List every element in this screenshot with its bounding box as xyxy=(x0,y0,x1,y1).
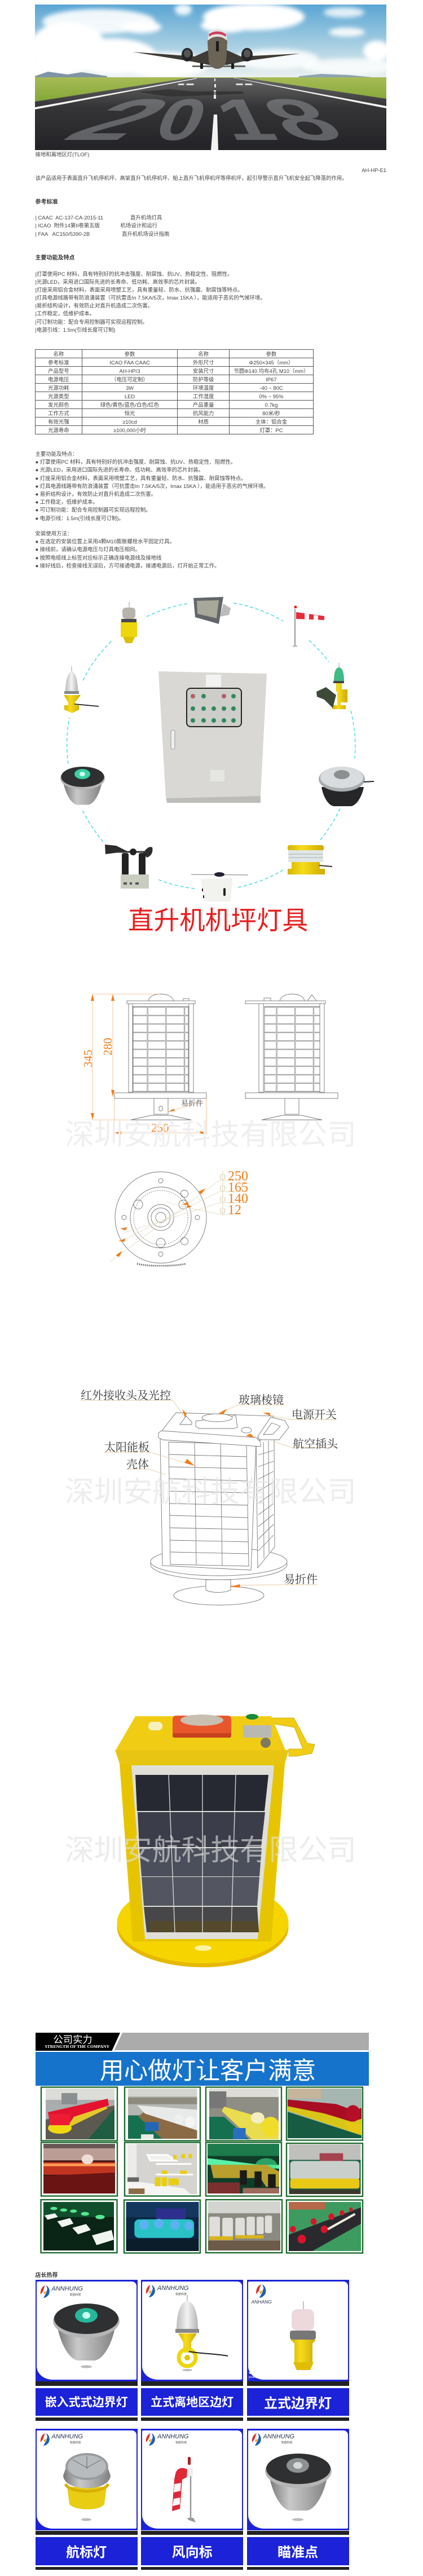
foot and base xyxy=(174,1586,264,1605)
logo: 安航科技 xyxy=(70,2441,81,2445)
dimension lines xyxy=(92,994,206,1134)
specification table: 有效光强 xyxy=(48,419,69,424)
silver embedded light xyxy=(319,767,374,806)
specification table: 产品重量 xyxy=(193,402,214,407)
callout: aviation plug: 航空插头 xyxy=(293,1435,338,1451)
product xyxy=(175,2295,228,2371)
specification table: 0.7kg xyxy=(265,402,277,407)
logo xyxy=(146,2285,189,2297)
logo: ANNHUNG xyxy=(263,2433,294,2440)
label: 立式离地区边灯 xyxy=(151,2393,233,2410)
green embedded light xyxy=(60,767,105,805)
standards list: 机场设计和运行 xyxy=(121,222,157,228)
right face xyxy=(256,1438,275,1568)
plane xyxy=(133,29,300,69)
specification table: 发光颜色 xyxy=(48,402,69,407)
specification table: 3W xyxy=(126,385,134,390)
heading: shop recommendations: 店长热荐 xyxy=(35,2272,58,2279)
description: 该产品适用于表面直升飞机停机坪、高架直升飞机停机坪、船上直升飞机停机坪等停机坪，起引导警示直升飞机安全起飞降落的作用。 xyxy=(35,175,347,181)
standards list: 直升机机场设计指南 xyxy=(122,231,169,237)
installation instructions: 安装使用方法： xyxy=(35,530,72,537)
section tag: company strength: 公司实力 xyxy=(53,2031,92,2046)
specification table: 绿色/黄色/蓝色/白色/红色 xyxy=(100,402,159,407)
yellow beacon xyxy=(288,845,332,874)
base plan view: ϕ xyxy=(219,1202,226,1216)
diameter labels xyxy=(228,1169,248,1217)
specification table: 工作方式 xyxy=(48,410,69,416)
dimension values: 345 xyxy=(81,1049,95,1067)
specification table: 光源类型 xyxy=(48,393,69,399)
base plan view: ϕ xyxy=(219,1191,226,1205)
product card: aiming point light xyxy=(247,2429,349,2570)
front shell xyxy=(160,1439,256,1570)
specification table: 抗风能力 xyxy=(193,410,214,416)
specification table: （电压可定制） xyxy=(111,376,148,383)
standards list xyxy=(35,214,169,237)
photo: red glow xyxy=(43,2144,115,2193)
features list 2: 主要功能及特点： xyxy=(35,451,78,457)
specification table: 工作湿度 xyxy=(193,393,214,399)
specification table: 节圆Φ140 均布4孔 M10（mm） xyxy=(233,368,309,373)
left elevation xyxy=(114,994,206,1120)
diameter labels: 165 xyxy=(228,1180,248,1195)
feature list: |工作稳定，低维护成本。 xyxy=(35,310,95,316)
specification table: 光源寿命 xyxy=(48,427,69,433)
photo: red lamps line xyxy=(46,2089,114,2139)
feature list: |电源引线：1.5m(引线长度可订制) xyxy=(35,327,116,333)
specification table: 安装尺寸 xyxy=(193,368,214,373)
standards list: | FAA AC150/5390-2B xyxy=(35,231,90,237)
watermark: 深圳安航科技有限公司 xyxy=(65,1826,356,1869)
windsock xyxy=(293,606,324,647)
base plan view xyxy=(109,1168,248,1267)
hero photo: airplane over runway xyxy=(35,5,386,150)
diameter labels: 12 xyxy=(228,1203,241,1217)
photo: green panels xyxy=(43,2202,114,2250)
specification table: 0% ~ 95% xyxy=(259,393,283,399)
specification table: 灯罩：PC xyxy=(259,427,283,433)
logo xyxy=(252,2433,296,2446)
anemometer xyxy=(105,845,153,889)
factory photo grid xyxy=(40,2086,363,2254)
control cabinet xyxy=(158,671,267,803)
specification table: 主体：铝合金 xyxy=(255,419,287,424)
feature list: |灯罩使用PC 材料，具有特别好的抗冲击强度、耐腐蚀、抗UV、热稳定性、阻燃性。 xyxy=(35,271,232,277)
specification table: Φ250×345（mm） xyxy=(249,359,293,366)
specification table: 参考标准 xyxy=(48,359,69,366)
features list 2: ● 灯罩使用PC 材料，具有特别好的抗冲击强度、耐腐蚀、抗UV、热稳定性、阻燃性。 xyxy=(35,459,236,465)
watermark: 深圳安航科技有限公司 xyxy=(65,1111,356,1153)
product card: elevated lift-off edge light xyxy=(141,2280,243,2421)
features list 2: ● 灯座采用铝合金材料，表面采用喷塑工艺，具有重量轻、防水、抗强震、耐腐蚀等特点。 xyxy=(35,475,246,481)
product xyxy=(63,2453,111,2521)
photo: clear lamps line xyxy=(128,2089,197,2139)
specification table: ≥10cd xyxy=(122,419,137,424)
specification table xyxy=(35,349,314,434)
callout: solar panel: 太阳能板 xyxy=(104,1438,149,1454)
installation instructions: ● 按照电缆线上标签对应标示正确连接电源线及接地线 xyxy=(35,555,161,561)
specification table: 电源电压 xyxy=(48,376,69,383)
feature list xyxy=(35,271,266,333)
label: 立式边界灯 xyxy=(264,2392,332,2411)
product card: elevated edge light xyxy=(247,2280,349,2421)
label xyxy=(35,2537,138,2565)
specification table: ICAO FAA CAAC xyxy=(109,359,150,366)
logo xyxy=(41,2433,83,2446)
logo: 安航科技 xyxy=(281,2441,293,2445)
standards list: | ICAO 附件14第II卷第五版 xyxy=(35,222,100,228)
photo: green lamps xyxy=(208,2144,279,2193)
callout: shell: 壳体 xyxy=(126,1455,149,1471)
tall clear light xyxy=(121,602,137,643)
logo: ANNHUNG xyxy=(157,2285,189,2292)
specification table: 参数 xyxy=(125,351,135,357)
exploded isometric view xyxy=(81,1400,339,1606)
label xyxy=(35,2388,138,2416)
frames xyxy=(41,2087,363,2253)
logo: ANNHUNG xyxy=(157,2433,189,2440)
specification table: 防护等级 xyxy=(193,376,214,383)
logo xyxy=(251,2284,272,2304)
specification table: 名称 xyxy=(53,351,64,357)
product ring diagram xyxy=(60,597,374,902)
green obstruction light xyxy=(316,663,347,709)
top face xyxy=(160,1413,274,1441)
dimension elevations xyxy=(81,994,338,1135)
label: 瞄准点 xyxy=(277,2541,318,2561)
clear obstruction light xyxy=(64,666,99,713)
logo: ANHANG xyxy=(252,2298,272,2304)
installation instructions: ● 接线前，请确认电源电压与灯具电压相同。 xyxy=(35,546,140,552)
model code: AH-HP-E1 xyxy=(362,167,386,173)
photo: red lamps yellow base xyxy=(288,2089,362,2138)
specification table: 80米/秒 xyxy=(262,410,280,416)
label xyxy=(141,2388,243,2416)
section tag: company strength: STRENGTH OF THE COMPANY xyxy=(45,2044,109,2049)
specification table: 环境温度 xyxy=(193,385,214,390)
callout: power switch: 电源开关 xyxy=(292,1405,337,1422)
base plan view: ϕ xyxy=(219,1168,226,1183)
diameter labels: 140 xyxy=(228,1192,248,1206)
leader lines xyxy=(81,1400,339,1585)
label xyxy=(141,2537,243,2565)
label xyxy=(247,2388,349,2416)
photo: white cylinders xyxy=(208,2201,280,2250)
specification table: -40 ~ 80C xyxy=(259,385,283,390)
specification table: AH-HP/3 xyxy=(119,368,140,373)
label: 航标灯 xyxy=(66,2541,107,2561)
watermark: 深圳安航科技有限公司 xyxy=(65,1468,356,1510)
standards list: 直升机场灯具 xyxy=(130,214,162,221)
dashed ring xyxy=(67,603,355,889)
features list 2: ● 电源引线：1.5m(引线长度可订制)。 xyxy=(35,515,124,521)
product card: recessed edge light xyxy=(36,2280,138,2421)
product card: windsock xyxy=(141,2429,243,2570)
label xyxy=(247,2537,349,2565)
features list 2: ● 光源LED，采用进口国际先进的长寿命、低功耗、高效率的芯片封装。 xyxy=(35,467,204,473)
logo: ANNHUNG xyxy=(52,2433,83,2440)
product xyxy=(265,2453,332,2522)
photo: white yellow lamps xyxy=(209,2089,279,2139)
diameter labels: 250 xyxy=(228,1169,248,1184)
white box xyxy=(191,872,248,902)
handle xyxy=(258,1417,289,1440)
features list 2: ● 灯具电源线路带有防浪涌装置（可抗雷击In 7.5KA/5次，Imax 15KA ），能适用于恶劣的气候环境。 xyxy=(35,483,269,489)
dimension values xyxy=(81,1038,169,1135)
warranty note: 5-3 xyxy=(248,2365,259,2376)
arrows xyxy=(182,1409,271,1588)
dimension values: 250 xyxy=(151,1121,169,1135)
features list 2: ● 可订制功能：配合专用控制器可实现远程控制。 xyxy=(35,507,151,513)
logo: 安航科技 xyxy=(175,2441,187,2445)
solar cells xyxy=(135,1775,268,1932)
features list 2: ● 易折结构设计，有效防止对直升机造成二次伤害。 xyxy=(35,491,156,497)
dimension values: 280 xyxy=(101,1038,114,1056)
product photo: solar helipad light xyxy=(115,1714,315,1967)
photo: blue lamps xyxy=(126,2202,199,2251)
features list 2: ● 工作稳定，低维护成本。 xyxy=(35,499,98,505)
floodlight xyxy=(193,597,231,624)
section title: 直升机机坪灯具 xyxy=(128,900,308,937)
specification table: LED xyxy=(125,393,135,399)
logo xyxy=(146,2433,189,2446)
product xyxy=(53,2304,120,2368)
specification table: 恒光 xyxy=(125,410,135,416)
runway lettering xyxy=(42,87,360,153)
banner: 用心做灯让客户满意 xyxy=(100,2052,316,2086)
callout: IR receiver: 红外接收头及光控 xyxy=(81,1386,171,1403)
specification table: 参数 xyxy=(266,351,276,357)
heading: reference standards: 参考标准 xyxy=(35,199,58,205)
warranty note: years warranty xyxy=(248,2375,271,2379)
photo: solar red lamps xyxy=(289,2202,361,2251)
logo: 安航科技 xyxy=(70,2293,81,2296)
specification table: 产品型号 xyxy=(48,368,69,373)
product card: beacon xyxy=(36,2429,138,2570)
features list 2 xyxy=(35,451,269,521)
banner xyxy=(35,2052,369,2086)
feature list: |灯座采用铝合金材料，表面采用喷塑工艺，具有重量轻、防水、抗强震、耐腐蚀等特点。 xyxy=(35,287,243,293)
heading: main features: 主要功能及特点 xyxy=(35,255,74,261)
right elevation xyxy=(245,994,338,1120)
feature list: |易折结构设计，有效防止对直升机造成二次伤害。 xyxy=(35,302,153,309)
photo: showroom shelves xyxy=(127,2144,197,2194)
caption: 接地和离地区灯(TLOF) xyxy=(35,151,89,157)
installation instructions: ● 接好线后，检查接线无误后，方可接通电源，接通电源后，灯开始正常工作。 xyxy=(35,562,220,569)
logo: ANNHUNG xyxy=(52,2285,83,2292)
fragile part label: 易折件 xyxy=(181,1097,203,1108)
feature list: |可订制功能：配合专用控制器可实现远程控制。 xyxy=(35,319,148,325)
standards list: | CAAC AC-137-CA-2015-11 xyxy=(35,214,103,221)
callout: breakable part: 易折件 xyxy=(284,1570,318,1586)
specification table: 光源功耗 xyxy=(48,385,69,390)
installation instructions: ● 在选定的安装位置上采用4颗M10膨胀螺栓水平固定灯具。 xyxy=(35,538,175,544)
logo: 安航科技 xyxy=(175,2293,187,2296)
warranty note xyxy=(248,2365,271,2379)
photo: clear lamps array xyxy=(289,2144,361,2194)
specification table: 材质 xyxy=(198,419,209,424)
feature list: |光源LED，采用进口国际先进的长寿命、低功耗、高效率的芯片封装。 xyxy=(35,279,200,285)
installation instructions xyxy=(35,530,220,569)
specification table: 名称 xyxy=(198,351,209,357)
product xyxy=(290,2301,316,2370)
base plan view: ϕ xyxy=(219,1180,226,1194)
specification table: IP67 xyxy=(266,376,277,383)
logo xyxy=(41,2285,83,2298)
product xyxy=(172,2457,196,2522)
label: 嵌入式式边界灯 xyxy=(45,2393,128,2410)
specification table: 外形尺寸 xyxy=(193,359,214,366)
specification table: ≥100,000小时 xyxy=(113,427,146,433)
callout: glass prism: 玻璃棱镜 xyxy=(239,1391,284,1407)
section tag: company strength xyxy=(35,2032,369,2050)
label: 风向标 xyxy=(172,2541,213,2561)
feature list: |灯具电源线路带有防浪涌装置（可抗雷击In 7.5KA/5次，Imax 15KA ），能适用于恶劣的气候环境。 xyxy=(35,294,266,301)
